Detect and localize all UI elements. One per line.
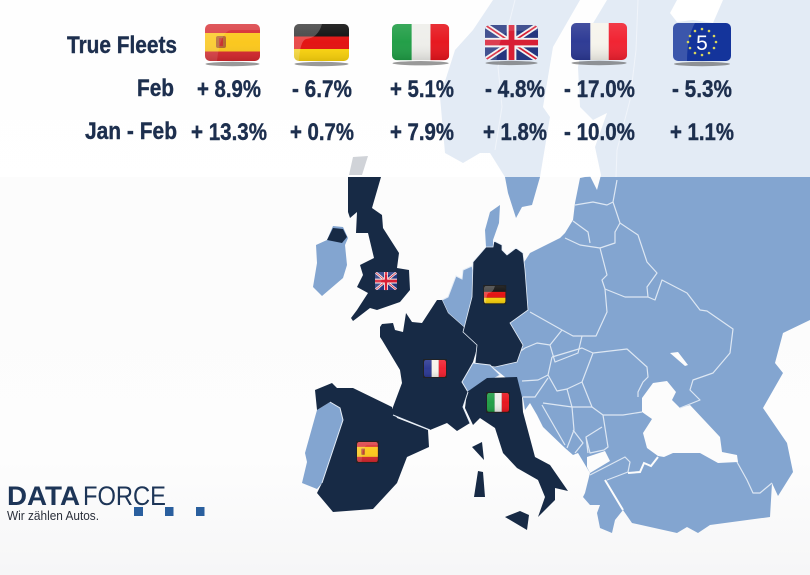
map flag: Spain	[356, 441, 379, 463]
Germany	[463, 241, 528, 367]
column: France: - 10.0%	[564, 119, 635, 146]
logo tagline: Wir zählen Autos.	[7, 509, 99, 523]
Denmark	[485, 205, 500, 247]
Scotland islands	[349, 156, 368, 175]
flag: Italy	[392, 24, 449, 65]
column: Italy	[390, 24, 454, 146]
logo wordmark: DATA	[7, 481, 80, 511]
column: Germany: - 6.7%	[292, 76, 352, 103]
row labels: Jan - Feb	[85, 118, 177, 145]
column: Italy: + 5.1%	[390, 76, 454, 103]
flag: Germany	[294, 24, 349, 66]
row labels	[67, 32, 177, 145]
column: Spain	[191, 24, 267, 146]
map flag: Italy	[486, 392, 510, 413]
Portugal	[302, 402, 343, 489]
Greece and Turkey strait	[605, 457, 658, 510]
Spain	[315, 383, 429, 512]
column: United Kingdom	[483, 25, 547, 146]
map flag: France	[423, 359, 447, 378]
map flag: Germany	[483, 285, 506, 304]
non-reporting countries: mainland Europe	[440, 0, 810, 533]
header overlay panel	[0, 0, 810, 177]
map flag: United Kingdom	[375, 272, 397, 290]
faint northern borders	[495, 0, 638, 177]
Sardinia	[474, 471, 485, 497]
table: True Fleets	[67, 23, 734, 146]
Great Britain	[348, 177, 410, 321]
logo squares	[134, 507, 204, 516]
column: EU5: - 5.3%	[672, 76, 732, 103]
column: Germany	[290, 24, 354, 146]
logo wordmark light: FORCE	[83, 481, 166, 511]
column: France: - 17.0%	[564, 76, 635, 103]
dark-country borders	[322, 392, 470, 483]
flag: Spain	[205, 24, 260, 66]
seas cut out of the mainland	[587, 0, 738, 473]
Switzerland	[462, 363, 500, 392]
column: United Kingdom: - 4.8%	[485, 76, 545, 103]
logo: Dataforce	[7, 481, 204, 523]
Sicily	[505, 511, 529, 530]
column: Italy: + 7.9%	[390, 119, 454, 146]
row labels: True Fleets	[67, 32, 177, 59]
Northern Ireland	[327, 228, 347, 243]
column: United Kingdom: + 1.8%	[483, 119, 547, 146]
flag: United Kingdom	[485, 25, 538, 65]
map of Europe	[302, 0, 810, 533]
column: EU5: + 1.1%	[670, 119, 734, 146]
France	[380, 300, 478, 431]
column: France	[564, 23, 635, 146]
column: EU5	[670, 23, 734, 146]
flag: EU5: 5	[696, 32, 708, 55]
flag: France	[571, 23, 627, 65]
column: Germany: + 0.7%	[290, 119, 354, 146]
Italy	[465, 377, 568, 517]
country borders	[518, 180, 772, 493]
Corsica	[472, 442, 484, 460]
Ireland	[313, 226, 348, 296]
column: Spain: + 13.3%	[191, 119, 267, 146]
column: Spain: + 8.9%	[197, 76, 261, 103]
Benelux	[442, 266, 480, 328]
row labels: Feb	[137, 75, 174, 102]
